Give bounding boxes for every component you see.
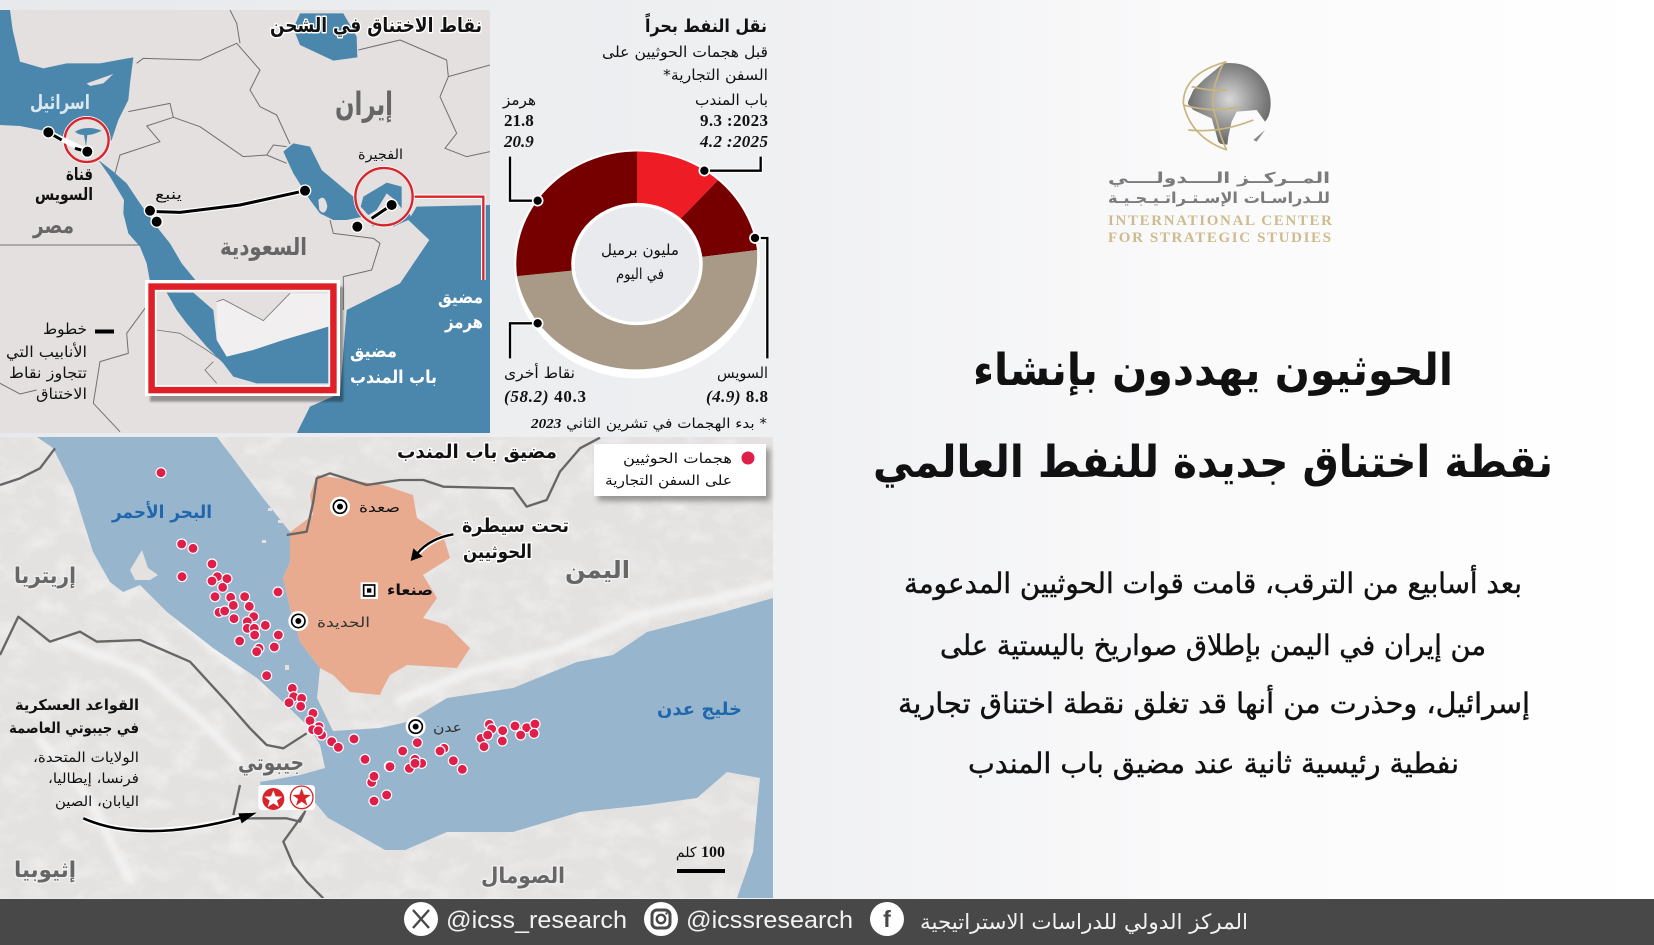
label: Djibouti: جيبوتي — [238, 751, 304, 776]
label: Bab al-Mandab values — [695, 91, 768, 151]
text block: military bases in Djibouti: في جيبوتي العاصمة — [9, 719, 139, 737]
legend: pipelines: الأنابيب التي — [6, 342, 87, 362]
map title: Bab al-Mandab: مضيق باب المندب — [397, 441, 557, 463]
label: under Houthi control — [462, 515, 569, 563]
label: Bab al-Mandab strait — [350, 341, 437, 388]
segment: Hormuz — [516, 151, 637, 276]
icon: globe — [1183, 62, 1271, 150]
panel: Bab al-Mandab attacks map — [0, 437, 773, 898]
donut centre label: مليون برميل — [601, 241, 679, 259]
legend: pipelines: تتجاوز نقاط — [9, 364, 87, 382]
legend: pipelines: خطوط — [43, 320, 87, 338]
label: Strait of Hormuz — [438, 287, 483, 333]
logo English name — [1108, 213, 1332, 246]
label: Yemen: اليمن — [565, 556, 630, 584]
text block: military bases in Djibouti: فرنسا، إيطاليا، — [48, 771, 139, 787]
label: Eritrea: إريتريا — [14, 564, 76, 589]
legend: Houthi attacks: على السفن التجارية — [605, 473, 732, 489]
main title — [873, 345, 1553, 488]
terrain highlights — [40, 585, 773, 880]
region: Houthi-controlled territory — [283, 475, 470, 695]
label: Bab al-Mandab strait: مضيق — [350, 341, 397, 362]
legend: Houthi attacks: هجمات الحوثيين — [623, 451, 732, 467]
donut subtitle: السفن التجارية* — [663, 66, 768, 84]
footer bar — [0, 899, 1654, 945]
label: Red Sea: البحر الأحمر — [111, 501, 212, 523]
label: other points values: نقاط أخرى — [504, 363, 575, 382]
text block: military bases in Djibouti — [9, 696, 139, 810]
logo English name: FOR STRATEGIC STUDIES — [1108, 230, 1331, 246]
icon: X — [404, 902, 438, 936]
footnote: * بدء الهجمات في تشرين الثاني 2023 — [530, 416, 767, 432]
map geography: seas and borders — [0, 10, 490, 433]
label: Fujairah: الفجيرة — [358, 147, 403, 163]
donut chart — [514, 150, 760, 378]
donut leader lines — [510, 157, 767, 358]
text block: military bases in Djibouti: الولايات المتحدة، — [33, 750, 139, 766]
label: other points values: (58.2) 40.3 — [504, 387, 586, 406]
chokepoints map title: نقاط الاختناق في الشحن — [270, 13, 482, 38]
logo: International Center for Strategic Studies — [1108, 62, 1332, 246]
scale bar — [676, 844, 725, 873]
icon: facebook — [870, 902, 904, 936]
label: Suez Canal: السويس — [35, 185, 93, 205]
label: Saudi Arabia: السعودية — [220, 233, 307, 261]
label: Strait of Hormuz: مضيق — [438, 287, 483, 308]
label: Suez Canal — [35, 165, 93, 205]
label: Aden: عدن — [433, 720, 462, 736]
label: other points values — [504, 363, 586, 406]
label: Hormuz values — [502, 91, 536, 151]
scale bar: 100 كلم — [676, 844, 725, 861]
label: under Houthi control: الحوثيين — [463, 541, 532, 563]
arrow to Houthi territory — [411, 534, 453, 561]
label: Somalia: الصومال — [481, 864, 565, 889]
main title: الحوثيون يهددون بإنشاء — [973, 345, 1453, 396]
label: Hodeidah: الحديدة — [317, 615, 370, 631]
city markers — [288, 497, 426, 737]
main title: نقطة اختناق جديدة للنفط العالمي — [873, 437, 1553, 488]
label: Yanbu: ينبع — [155, 187, 182, 203]
label: Hormuz values: هرمز — [502, 91, 536, 109]
icon: facebook: f — [883, 906, 891, 932]
label: Suez values: السويس — [717, 364, 768, 382]
attack markers — [156, 468, 540, 806]
sea: Red Sea and Gulf of Aden — [37, 437, 773, 898]
military bases stars — [258, 785, 315, 810]
label: Hormuz values: 21.8 — [504, 111, 534, 130]
Suez Canal circle — [63, 116, 111, 164]
X handle: @icss_research — [446, 907, 627, 934]
country borders — [0, 438, 600, 898]
islands: Dahlak archipelago — [130, 508, 289, 670]
label: under Houthi control: تحت سيطرة — [462, 515, 569, 537]
label: Suez values: (4.9) 8.8 — [706, 387, 768, 406]
logo English name: INTERNATIONAL CENTER — [1108, 213, 1332, 229]
label: Bab al-Mandab values: باب المندب — [695, 91, 768, 109]
panel: shipping chokepoints map — [0, 10, 490, 433]
legend: pipelines: الاختناق — [36, 385, 87, 403]
donut centre label: في اليوم — [616, 265, 664, 284]
panel: oil transit donut — [502, 13, 768, 432]
legend: Houthi attacks — [594, 444, 770, 501]
body paragraph: من إيران في اليمن بإطلاق صواريخ باليستية على — [940, 629, 1486, 662]
text block: military bases in Djibouti: القواعد العسكرية — [15, 696, 139, 714]
label: Egypt: مصر — [32, 214, 74, 239]
segment: Suez — [680, 180, 757, 257]
label: Bab al-Mandab values: 9.3 :2023 — [700, 111, 768, 130]
Hormuz circle with connector — [353, 166, 483, 280]
label: Bab al-Mandab values: 4.2 :2025 — [699, 132, 768, 151]
donut subtitle: قبل هجمات الحوثيين على — [602, 43, 768, 61]
logo Arabic name — [1108, 169, 1330, 207]
label: Gulf of Aden: خليج عدن — [657, 699, 742, 720]
label: Bab al-Mandab strait: باب المندب — [350, 367, 437, 388]
label: Sanaa: صنعاء — [387, 581, 433, 599]
donut subtitle — [602, 43, 768, 84]
label: Israel: اسرائيل — [30, 90, 90, 114]
label: Suez Canal: قناة — [66, 165, 93, 185]
footer organisation name: المركز الدولي للدراسات الاستراتيجية — [920, 910, 1248, 934]
body paragraph — [898, 564, 1530, 780]
label: Suez values — [706, 364, 768, 406]
donut heading: نقل النفط بحراً — [645, 13, 767, 37]
logo Arabic name: المــركــز الــــدولــــي — [1108, 169, 1330, 187]
body paragraph: إسرائيل، وحذرت من أنها قد تغلق نقطة اختناق تجارية — [898, 684, 1530, 720]
segment: Bab al-Mandab — [637, 151, 718, 219]
icon: instagram — [644, 902, 678, 936]
label: Strait of Hormuz: هرمز — [444, 312, 483, 333]
donut centre label — [601, 241, 679, 284]
label: Hormuz values: 20.9 — [503, 132, 534, 151]
body paragraph: بعد أسابيع من الترقب، قامت قوات الحوثيين المدعومة — [904, 564, 1522, 600]
pipelines — [43, 127, 397, 232]
text block: military bases in Djibouti: اليابان، الصين — [55, 794, 139, 810]
label: Saada: صعدة — [359, 500, 400, 516]
Bab al-Mandab inset box — [145, 280, 343, 402]
legend: pipelines — [6, 320, 114, 403]
label: Ethiopia: إثيوبيا — [14, 858, 76, 883]
logo Arabic name: للـدراسـات الإسـتـراتـيـجـيـة — [1108, 189, 1330, 207]
body paragraph: نفطية رئيسية ثانية عند مضيق باب المندب — [968, 747, 1459, 780]
arrow to military bases — [83, 813, 257, 831]
segment: other — [517, 250, 757, 369]
instagram handle: @icssresearch — [686, 907, 853, 934]
label: Iran: إيران — [335, 85, 393, 124]
